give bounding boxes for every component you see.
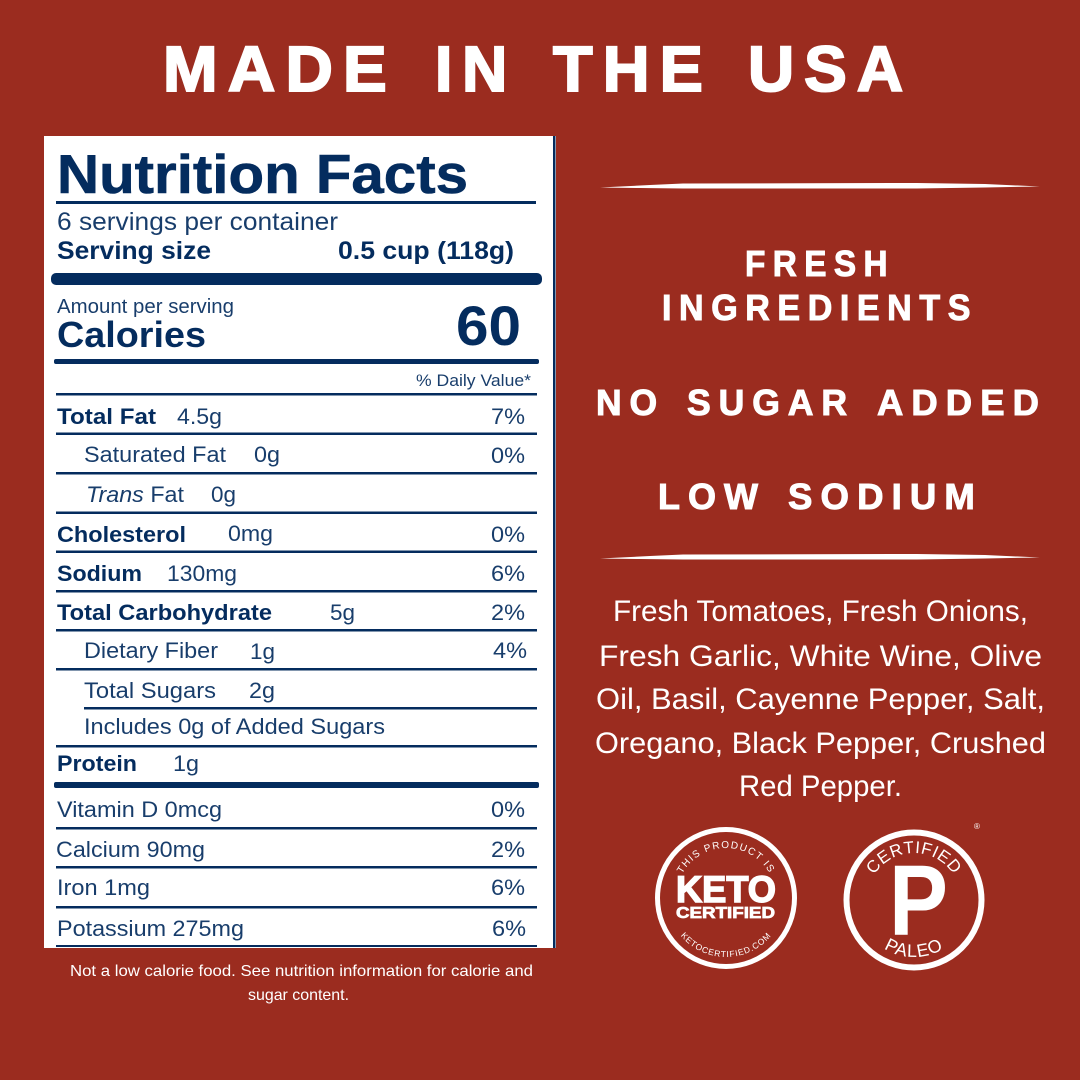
row: cholesterol <box>57 521 525 547</box>
row: potassium: Potassium 275mg <box>57 916 244 941</box>
icon: keto certified badge: THIS PRODUCT IS <box>676 841 774 872</box>
title: THE <box>553 33 713 105</box>
footnote: sugar content. <box>248 987 349 1004</box>
row: iron: 6% <box>491 875 525 900</box>
daily value header: % Daily Value* <box>416 371 531 390</box>
row: vitamin d: Vitamin D 0mcg <box>57 797 222 822</box>
row: potassium: 6% <box>492 916 526 941</box>
icon: keto certified badge: CERTIFIED <box>676 905 775 922</box>
claim: low sodium: SODIUM <box>788 476 983 517</box>
title <box>163 33 913 105</box>
ingredients list: Fresh Tomatoes, Fresh Onions, <box>613 595 1028 628</box>
icon: keto certified badge <box>655 827 797 969</box>
ingredients list: Oil, Basil, Cayenne Pepper, Salt, <box>596 683 1045 716</box>
row: total carbohydrate: 5g <box>330 600 355 625</box>
row: protein: 1g <box>173 751 199 776</box>
row: saturated fat <box>84 442 525 468</box>
icon: certified paleo badge <box>844 822 984 970</box>
row: total carbohydrate: Total Carbohydrate <box>57 600 272 625</box>
servings block: 6 servings per container <box>57 208 338 236</box>
row: calcium <box>56 837 525 862</box>
calories block <box>57 294 521 357</box>
icon: certified paleo badge: P <box>889 845 948 957</box>
row: vitamin d: 0% <box>491 797 525 822</box>
ingredients list: Oregano, Black Pepper, Crushed <box>595 727 1046 760</box>
title: USA <box>748 33 913 105</box>
row: dietary fiber: Dietary Fiber <box>84 638 218 663</box>
claim: low sodium: LOW <box>658 476 766 517</box>
icon: keto certified badge: KETO <box>676 869 776 910</box>
footnote: Not a low calorie food. See nutrition information for calorie and <box>70 963 533 980</box>
heading: nutrition facts: Nutrition Facts <box>57 143 468 205</box>
claim: no sugar added: NO <box>596 382 665 423</box>
claim: no sugar added: ADDED <box>877 382 1047 423</box>
row: dietary fiber: 1g <box>250 639 275 664</box>
icon: certified paleo badge: CERTIFIED <box>867 841 960 872</box>
calories block: 60 <box>456 294 521 357</box>
row: iron <box>57 875 525 900</box>
row: total fat <box>57 404 525 429</box>
title: MADE <box>163 33 397 105</box>
row: saturated fat: 0% <box>491 443 525 468</box>
row: sodium <box>57 561 525 586</box>
row: added sugars: Includes 0g of Added Sugars <box>84 714 385 739</box>
panel: nutrition facts label <box>44 136 556 948</box>
row: sodium: 130mg <box>167 561 237 586</box>
ingredients list <box>595 595 1046 803</box>
row: protein: Protein <box>57 751 137 776</box>
icon: keto certified badge: KETOCERTIFIED.COM <box>681 932 770 957</box>
row: trans fat: Trans Fat <box>86 482 184 507</box>
icon: certified paleo badge: PALEO <box>885 938 941 957</box>
row: total sugars: Total Sugars <box>84 678 216 703</box>
row: trans fat: 0g <box>211 482 236 507</box>
row: total fat: Total Fat <box>57 404 157 429</box>
footnote <box>70 963 533 1004</box>
row: total carbohydrate <box>57 600 525 625</box>
calories block: Calories <box>57 314 206 355</box>
claim: no sugar added <box>596 382 1047 423</box>
row: cholesterol: 0% <box>491 522 525 547</box>
ingredients list: Red Pepper. <box>739 770 902 803</box>
row: sodium: 6% <box>491 561 525 586</box>
claim: low sodium <box>658 476 983 517</box>
servings block <box>57 208 514 265</box>
row: dietary fiber <box>84 638 527 664</box>
row: trans fat <box>86 482 236 507</box>
row: dietary fiber: 4% <box>493 638 527 663</box>
row: total fat: 7% <box>491 404 525 429</box>
claim: fresh ingredients: INGREDIENTS <box>662 287 978 328</box>
row: total fat: 4.5g <box>177 404 222 429</box>
row: total sugars: 2g <box>249 678 275 703</box>
servings block: 0.5 cup (118g) <box>338 237 514 265</box>
title: IN <box>435 33 517 105</box>
claim: fresh ingredients: FRESH <box>745 243 895 284</box>
row: calcium: 2% <box>491 837 525 862</box>
icon: certified paleo badge: ® <box>974 822 980 831</box>
claims list <box>596 243 1047 517</box>
label background <box>44 136 556 948</box>
claim: fresh ingredients <box>662 243 978 328</box>
row: total sugars <box>84 678 275 703</box>
row: vitamin d <box>57 797 525 822</box>
row: saturated fat: Saturated Fat <box>84 442 226 467</box>
row: cholesterol: 0mg <box>228 521 273 546</box>
row: saturated fat: 0g <box>254 442 280 467</box>
claim: no sugar added: SUGAR <box>687 382 855 423</box>
row: protein <box>57 751 199 776</box>
row: sodium: Sodium <box>57 561 142 586</box>
row: total carbohydrate: 2% <box>491 600 525 625</box>
row: cholesterol: Cholesterol <box>57 522 186 547</box>
servings block: Serving size <box>57 237 211 265</box>
ingredients list: Fresh Garlic, White Wine, Olive <box>599 640 1042 673</box>
row: calcium: Calcium 90mg <box>56 837 205 862</box>
row: potassium <box>57 916 526 941</box>
row: iron: Iron 1mg <box>57 875 150 900</box>
calories block: Amount per serving <box>57 296 234 318</box>
